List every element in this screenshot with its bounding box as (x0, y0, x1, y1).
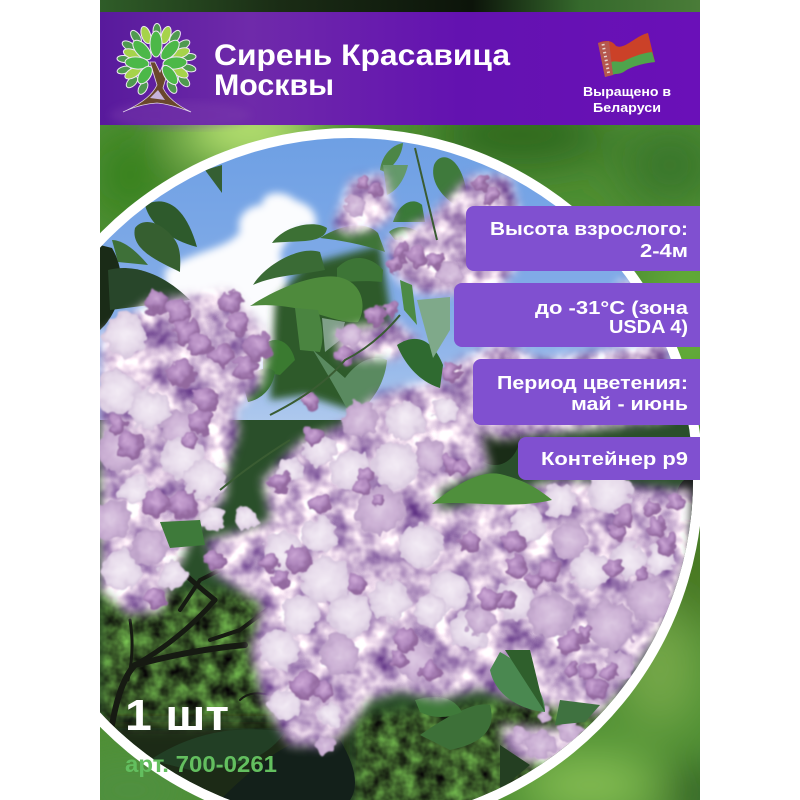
right cluster florets (510, 507, 546, 543)
badge: adult height: 2-4м (640, 240, 688, 261)
top strip (100, 0, 700, 12)
grown in Belarus caption (584, 87, 670, 114)
center cluster buds (303, 427, 323, 447)
upper cluster buds (391, 243, 409, 261)
quantity: 1 шт (125, 691, 229, 740)
lower foliage base (100, 405, 704, 800)
white circle frame (100, 128, 700, 800)
green leaves over the flowers (160, 280, 600, 790)
leaf veins and stems (220, 148, 437, 490)
badge: adult height (466, 206, 700, 271)
upper green leaves (100, 143, 467, 418)
badge: frost hardiness: USDA 4) (609, 316, 688, 337)
photo of lilac in bloom (90, 130, 704, 800)
badge: flowering period (473, 359, 700, 425)
badge: adult height: Высота взрослого: (490, 218, 688, 239)
product card (100, 0, 700, 800)
main lilac clusters (100, 290, 692, 765)
header band (100, 12, 700, 129)
title: Москвы (214, 69, 334, 102)
grown in Belarus caption: Беларуси (593, 100, 661, 115)
lower small flowers (526, 731, 554, 759)
cloud (165, 193, 316, 360)
badge: container (518, 437, 700, 480)
badge: frost hardiness (454, 283, 700, 347)
left cluster buds (145, 290, 169, 314)
right cluster buds (609, 524, 627, 542)
florets and buds (90, 173, 683, 759)
center cluster florets (263, 532, 303, 572)
sky (100, 130, 700, 450)
title (215, 44, 510, 96)
left cluster florets (103, 313, 147, 357)
grown in Belarus caption: Выращено в (583, 84, 671, 99)
article number: арт. 700-0261 (125, 751, 277, 777)
icon: Belarus flag (598, 33, 655, 77)
badge: container: Контейнер р9 (541, 448, 688, 469)
dark branches (112, 560, 280, 725)
badge: flowering period: Период цветения: (497, 372, 688, 393)
logo: tree (116, 24, 197, 112)
upper lilac clusters (332, 172, 670, 440)
upper foliage mass (270, 245, 395, 410)
badge: frost hardiness: до -31°C (зона (535, 297, 689, 318)
title: Сирень Красавица (214, 39, 510, 72)
badge: flowering period: май - июнь (571, 393, 688, 414)
blurred green background (100, 125, 700, 800)
